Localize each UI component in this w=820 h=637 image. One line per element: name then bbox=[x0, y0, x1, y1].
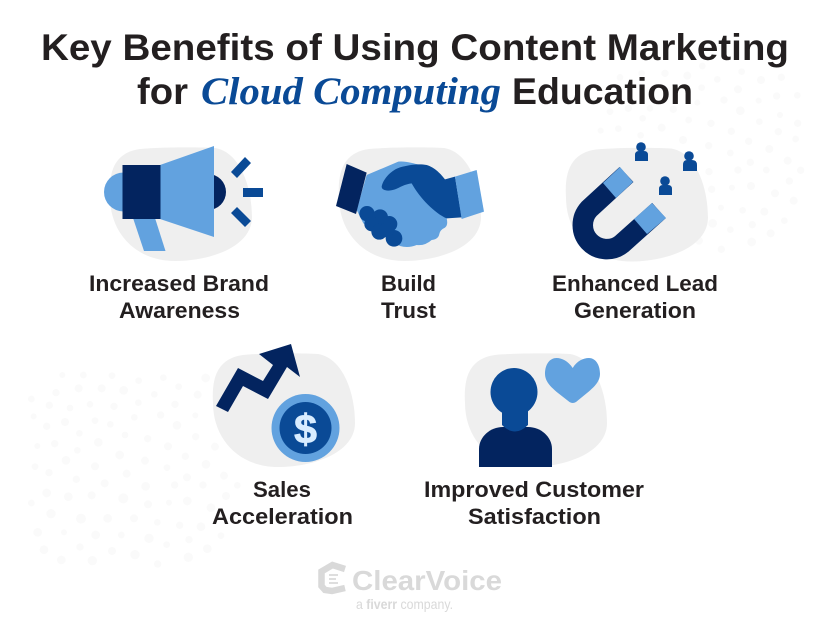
label: Improved Customer Satisfaction: Satisfaction bbox=[468, 504, 601, 529]
icon: rising arrow and dollar coin: $ bbox=[294, 406, 317, 452]
logo: ClearVoice bbox=[322, 565, 502, 612]
icon: magnet and people bbox=[566, 142, 708, 262]
label: Build Trust: Trust bbox=[381, 298, 437, 323]
icon: customer and heart bbox=[465, 353, 607, 467]
label: Increased Brand Awareness bbox=[89, 271, 269, 323]
title: Cloud Computing bbox=[201, 70, 501, 113]
label: Increased Brand Awareness: Awareness bbox=[119, 298, 240, 323]
label: Sales Acceleration: Sales bbox=[253, 477, 311, 502]
label: Enhanced Lead Generation bbox=[552, 271, 718, 323]
label: Enhanced Lead Generation: Enhanced Lead bbox=[552, 271, 718, 296]
title: for bbox=[137, 71, 188, 112]
label: Enhanced Lead Generation: Generation bbox=[574, 298, 696, 323]
title bbox=[41, 27, 789, 113]
label: Sales Acceleration: Acceleration bbox=[212, 504, 353, 529]
label: Increased Brand Awareness: Increased Brand bbox=[89, 271, 269, 296]
label: Build Trust: Build bbox=[381, 271, 436, 296]
label: Improved Customer Satisfaction: Improved Customer bbox=[424, 477, 644, 502]
icon: megaphone bbox=[104, 146, 263, 261]
icon: handshake bbox=[336, 147, 484, 261]
logo: ClearVoice: a fiverr company. bbox=[356, 596, 453, 612]
label: Build Trust bbox=[381, 271, 437, 323]
title: Education bbox=[512, 71, 693, 112]
icon: rising arrow and dollar coin bbox=[213, 344, 355, 467]
logo: ClearVoice: ClearVoice bbox=[352, 565, 502, 596]
label: Improved Customer Satisfaction bbox=[424, 477, 644, 529]
title: Key Benefits of Using Content Marketing bbox=[41, 27, 789, 68]
label: Sales Acceleration bbox=[212, 477, 353, 529]
